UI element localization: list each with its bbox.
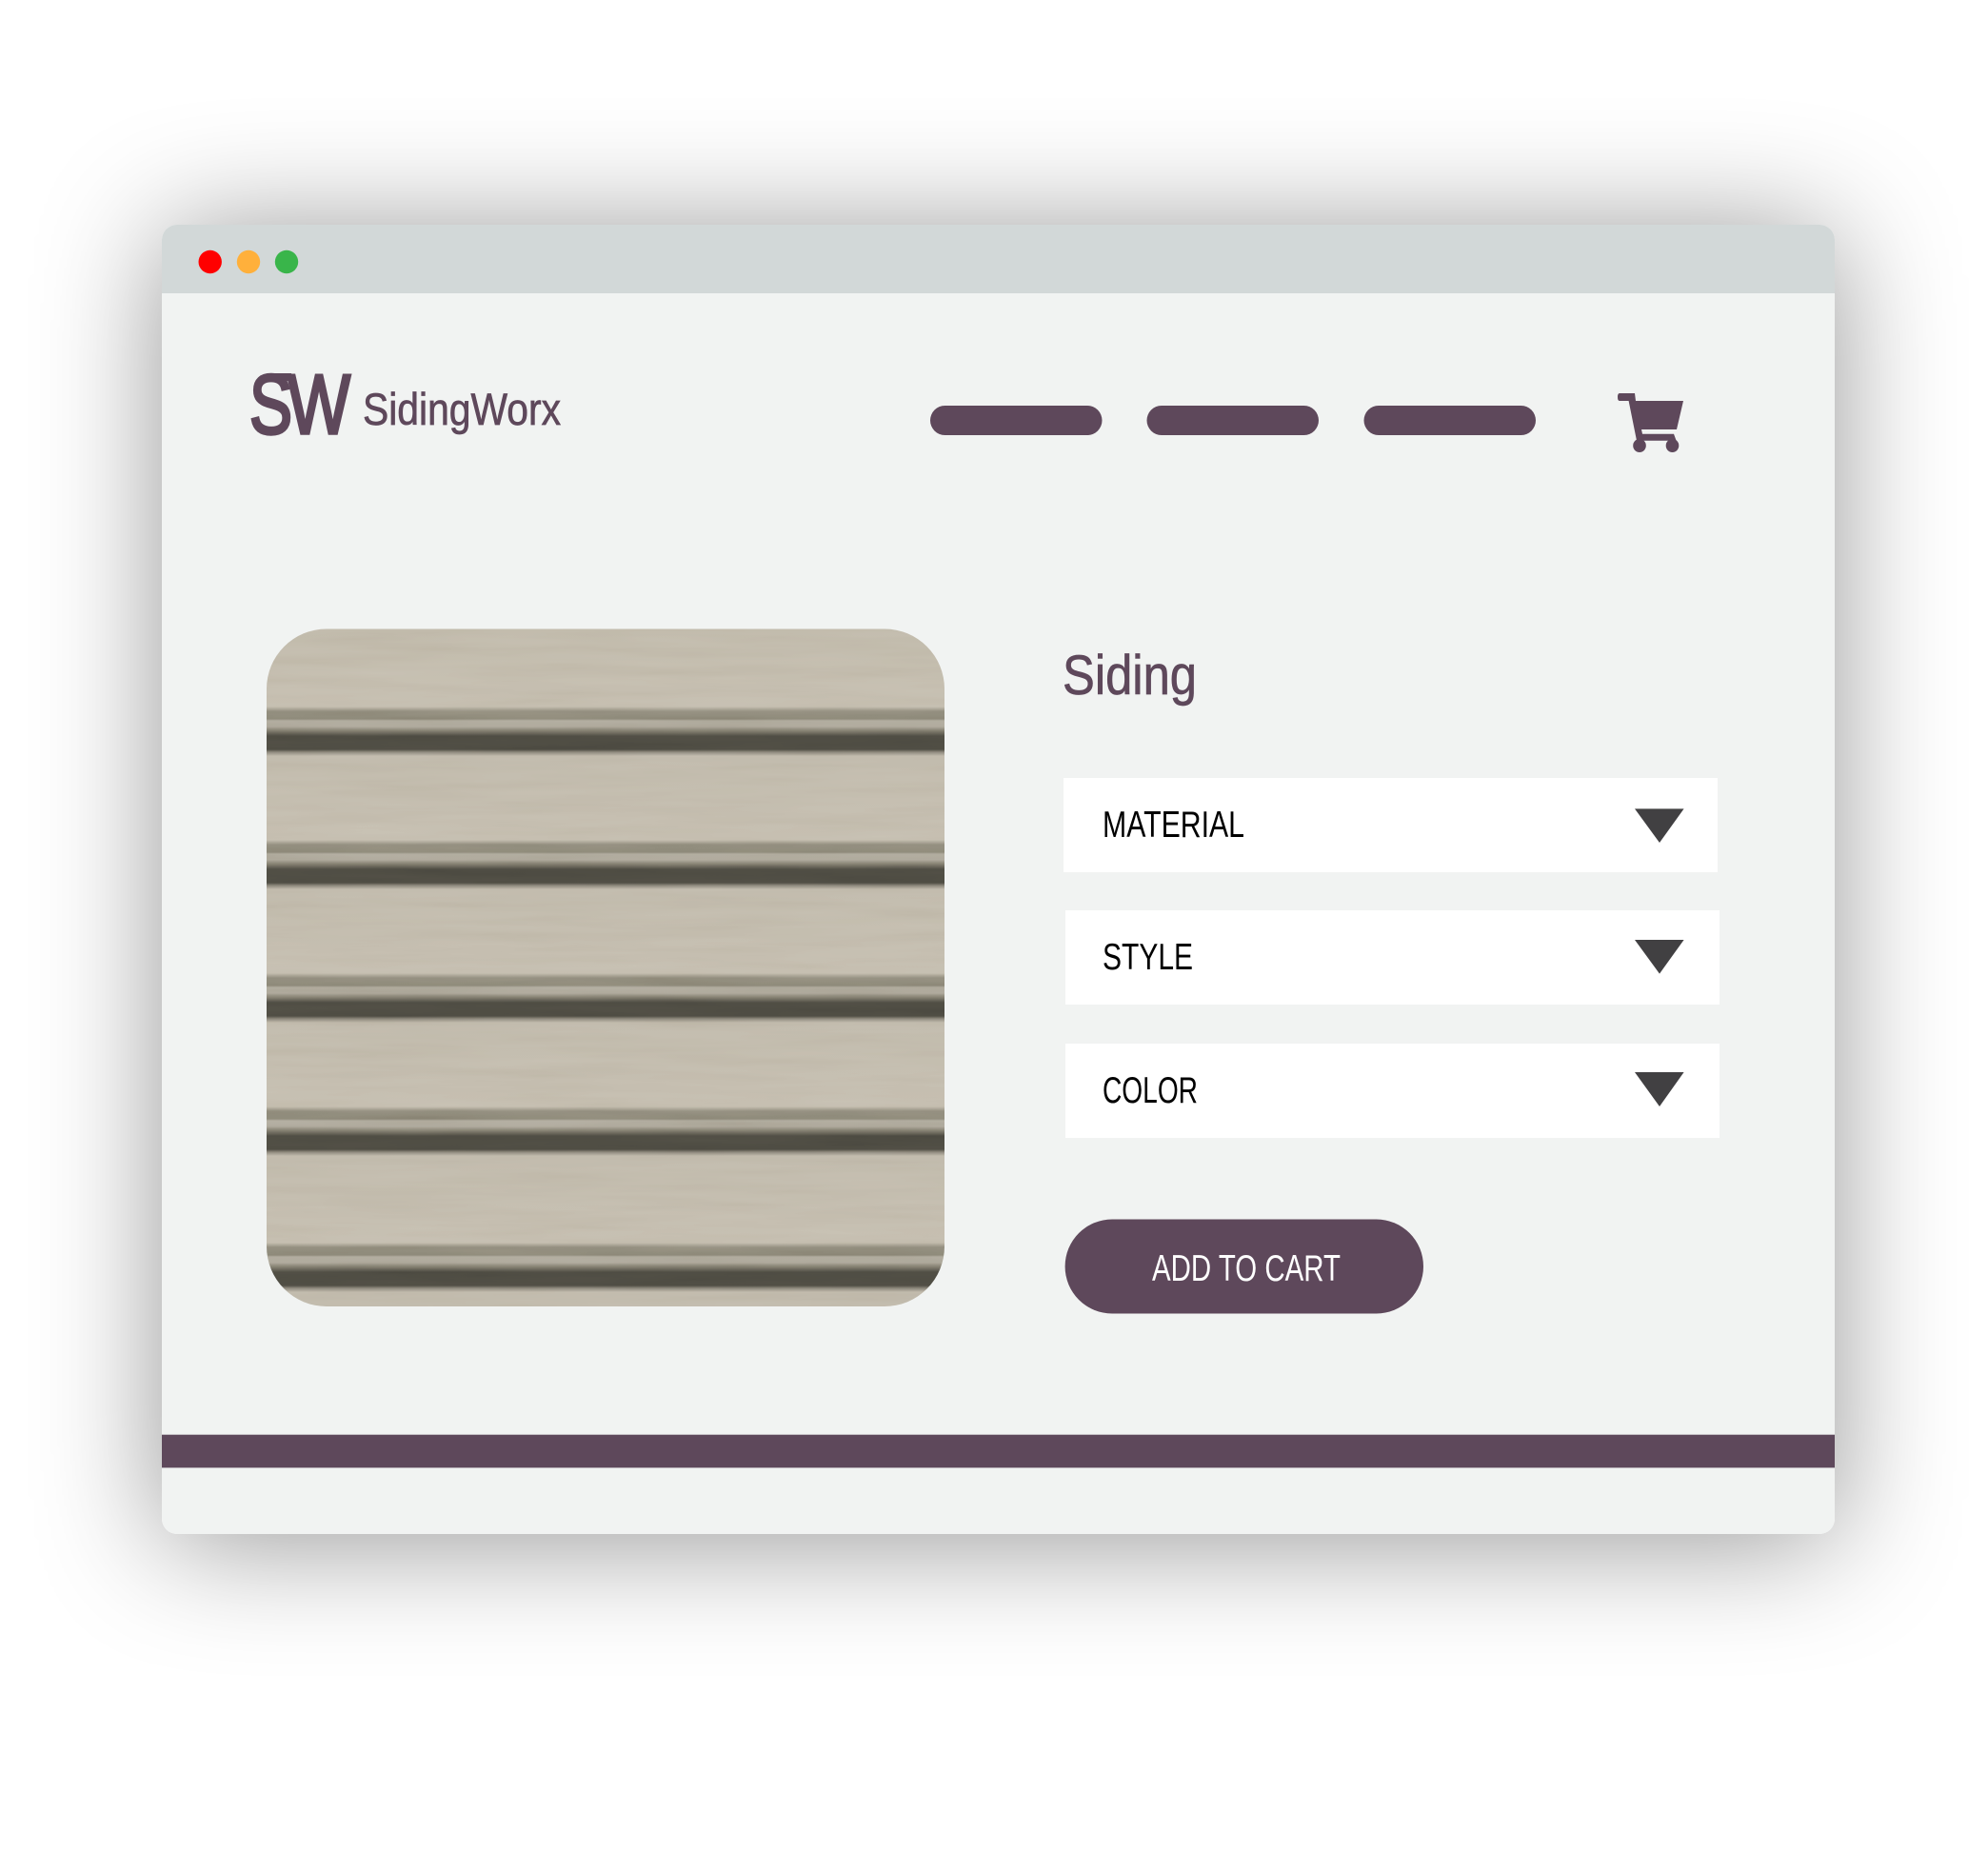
product image: siding swatch xyxy=(267,628,944,1306)
navigation pills xyxy=(930,406,1536,435)
logo: SW SidingWorx: W xyxy=(288,357,350,451)
browser window shadow xyxy=(162,225,1835,1534)
logo: SW SidingWorx xyxy=(249,357,561,451)
dropdown: style xyxy=(1065,910,1720,1005)
browser window xyxy=(162,225,1835,1534)
logo: SW SidingWorx: S xyxy=(249,357,292,451)
dropdown: color xyxy=(1065,1044,1720,1138)
dropdown: color: COLOR xyxy=(1103,1070,1198,1111)
dropdown: style: STYLE xyxy=(1103,937,1193,978)
logo: SW SidingWorx: SidingWorx xyxy=(363,384,561,434)
dropdown: material xyxy=(1064,778,1718,872)
footer bar xyxy=(162,1435,1835,1467)
add to cart button: ADD TO CART xyxy=(1152,1248,1341,1289)
dropdown: material: MATERIAL xyxy=(1103,805,1244,846)
title bar xyxy=(162,225,1835,293)
product heading: Siding xyxy=(1063,645,1197,707)
icon: shopping cart xyxy=(1618,393,1683,452)
add to cart button xyxy=(1065,1219,1423,1314)
window control dots xyxy=(198,250,298,273)
